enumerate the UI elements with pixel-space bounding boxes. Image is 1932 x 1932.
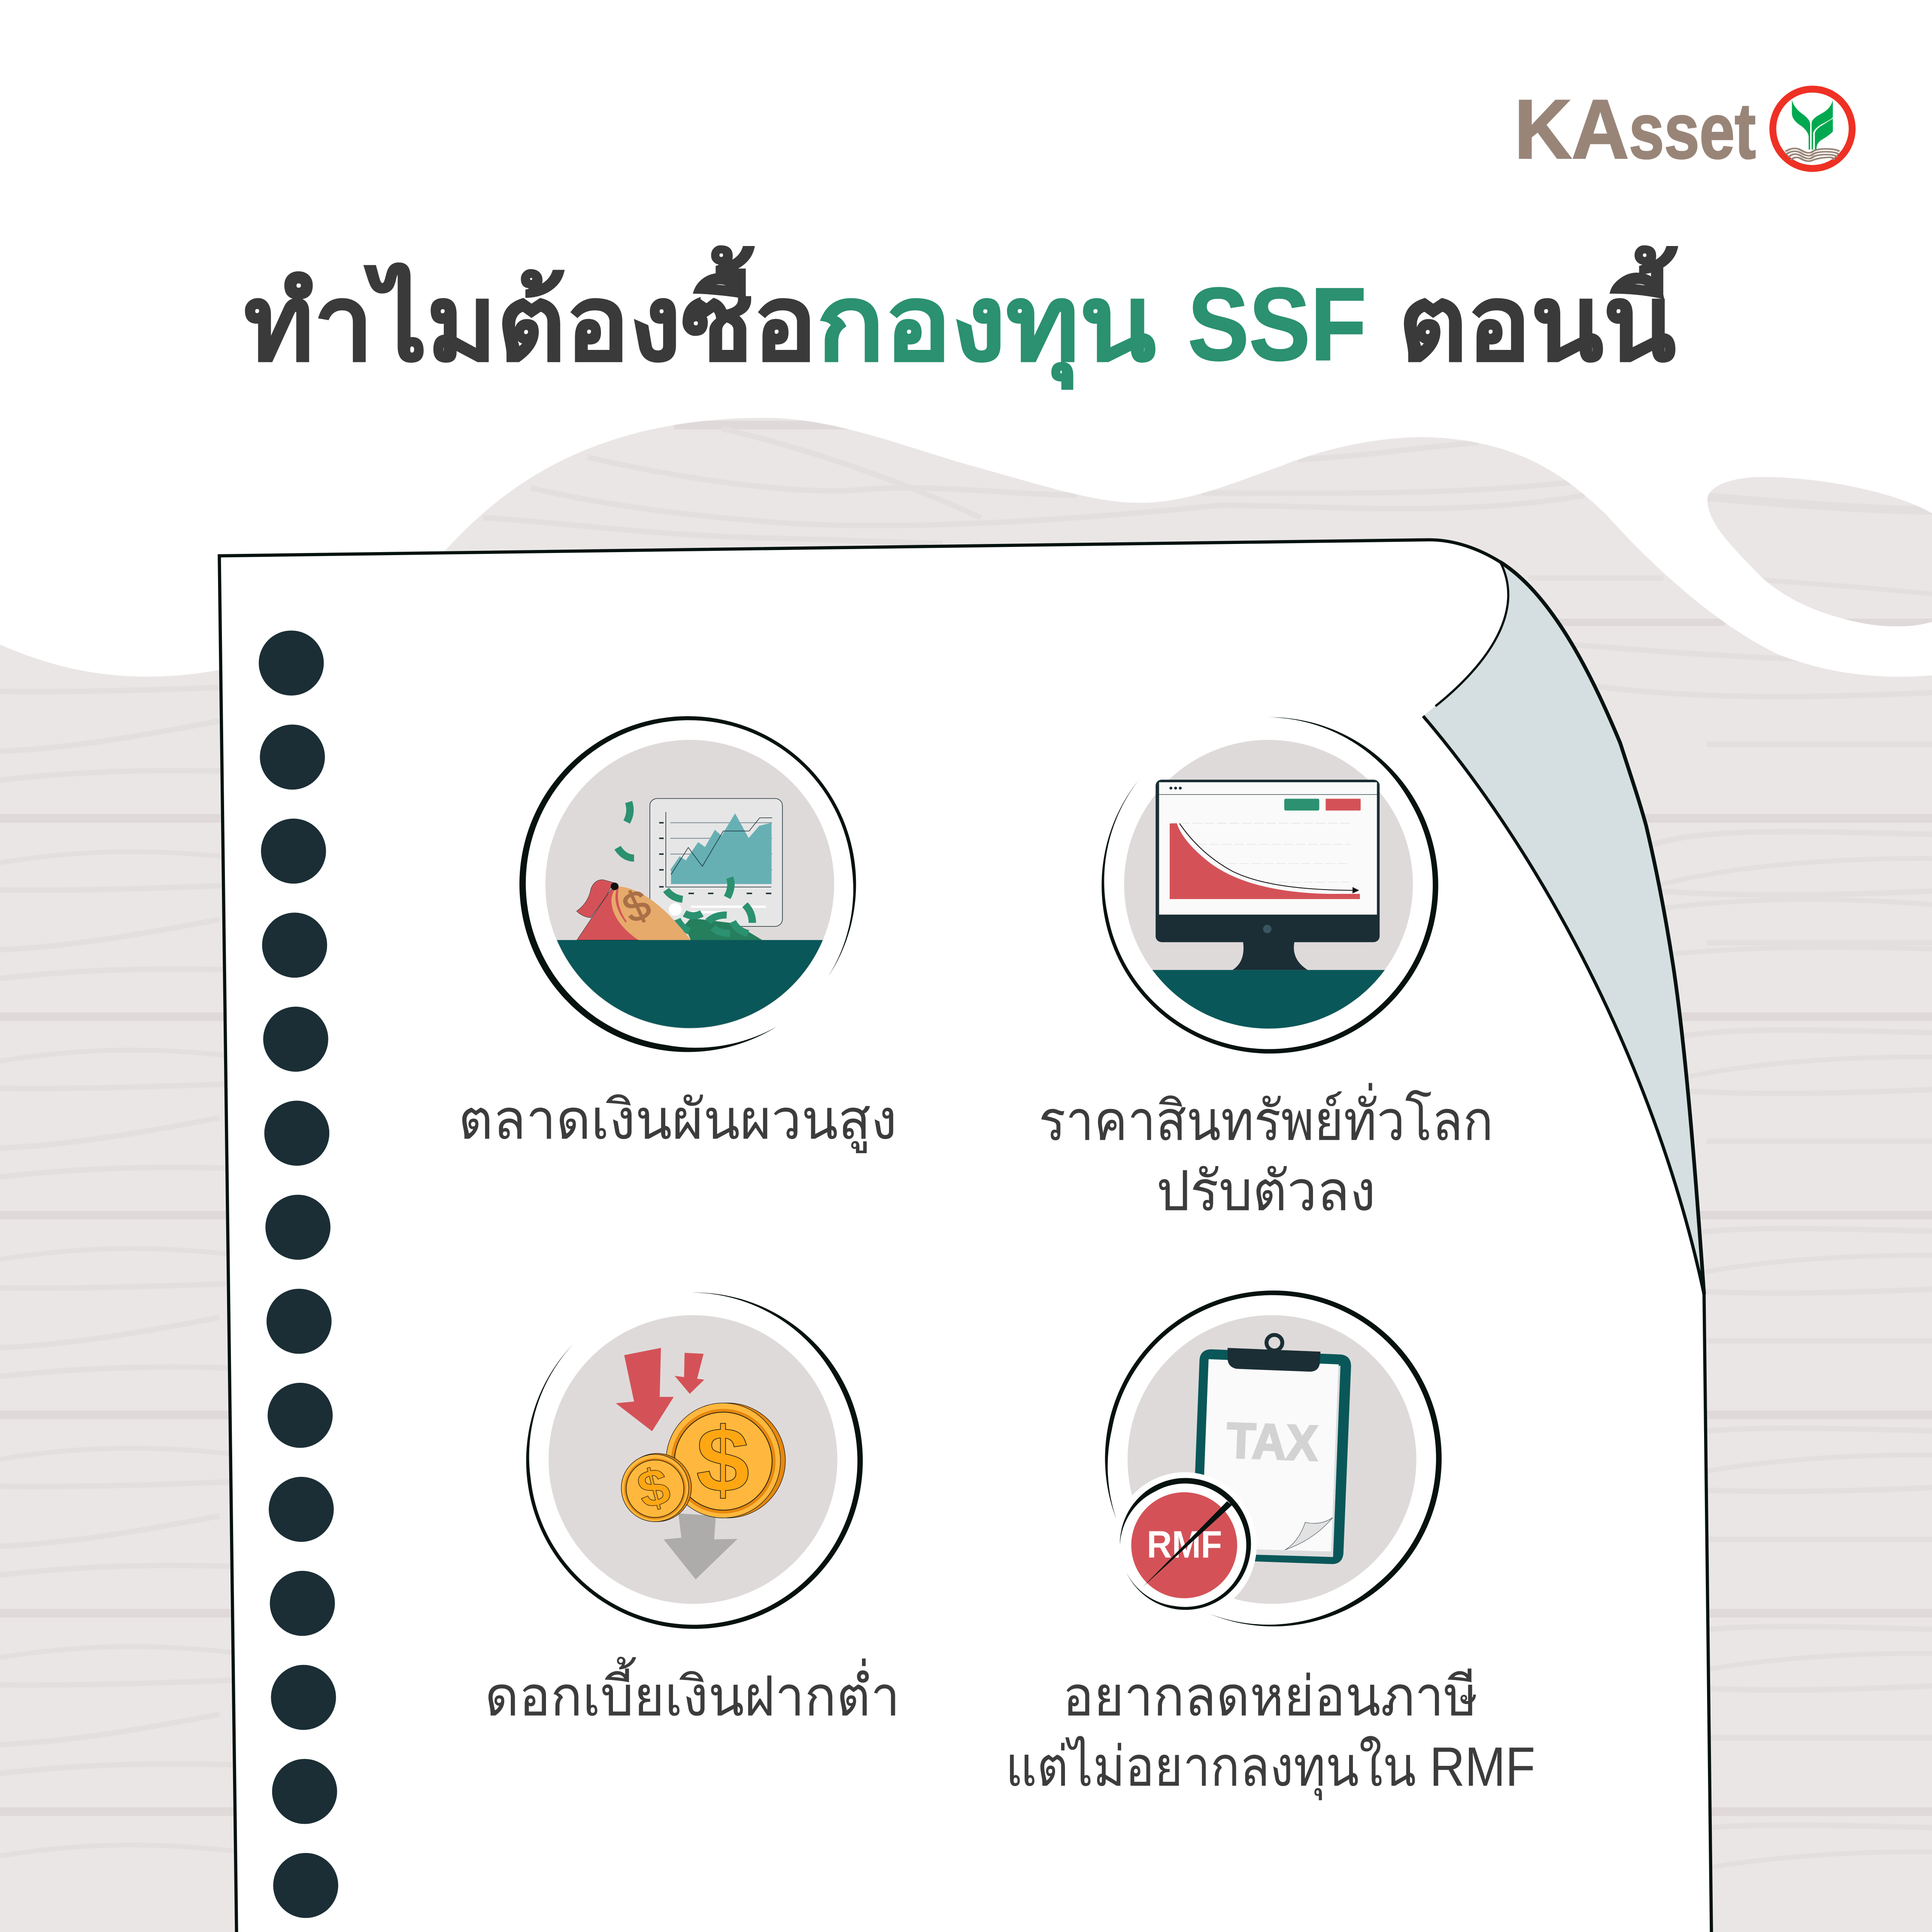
ring xyxy=(1105,1291,1442,1626)
money pile xyxy=(685,918,762,940)
ring xyxy=(1101,717,1438,1054)
title xyxy=(244,246,1677,389)
flying bills xyxy=(618,802,752,933)
title part 4: ตอนนี้ xyxy=(1398,246,1677,383)
logo: KAsset xyxy=(1514,82,1852,176)
text: market volatility: ตลาดเงินผันผวนสูง xyxy=(458,1089,897,1153)
RMF badge: RMF xyxy=(1147,1524,1222,1566)
icon: coins with falling arrows xyxy=(526,1293,863,1629)
text: tax reduction without RMF xyxy=(1005,1666,1535,1801)
teal ground xyxy=(1153,970,1385,1029)
grey disc xyxy=(1128,1315,1416,1604)
title part 1: ทำไมต้องซื้อ xyxy=(244,246,817,383)
line 2: ปรับตัวลง xyxy=(1156,1160,1376,1222)
paper sheet xyxy=(219,540,1711,1932)
binder holes xyxy=(259,631,338,1918)
ring xyxy=(519,716,856,1052)
ring xyxy=(526,1293,863,1629)
icon: tax clipboard and RMF prohibited xyxy=(1105,1291,1442,1626)
icon: volatile market money bag xyxy=(519,716,856,1052)
chart card xyxy=(650,799,783,927)
logo emblem xyxy=(1773,89,1852,168)
small coin: $ xyxy=(631,1456,676,1520)
logo wordmark xyxy=(1514,82,1756,176)
line 1: ราคาสินทรัพย์ทั่วโลก xyxy=(1039,1083,1493,1152)
big coin: $ xyxy=(696,1409,749,1511)
line 1: อยากลดหย่อนภาษี xyxy=(1063,1666,1478,1728)
RMF badge xyxy=(1113,1472,1257,1618)
clipboard: TAX xyxy=(1226,1413,1319,1471)
text: low deposit rate: ดอกเบี้ยเงินฝากต่ำ xyxy=(485,1657,900,1728)
monitor xyxy=(1156,780,1380,970)
grey disc xyxy=(1124,740,1413,1029)
panel: notebook paper xyxy=(219,540,1711,1932)
title part 3 highlighted: SSF xyxy=(1188,267,1366,382)
grey arrow xyxy=(664,1513,737,1580)
grey disc xyxy=(549,1315,837,1604)
large red arrow xyxy=(616,1348,674,1431)
small coin xyxy=(621,1453,692,1522)
grey disc xyxy=(545,740,834,1029)
money bag: $ xyxy=(616,881,658,933)
page curl xyxy=(1423,562,1704,1294)
text: global asset prices xyxy=(1039,1083,1493,1222)
logo wordmark: KA xyxy=(1514,82,1629,176)
logo wordmark: sset xyxy=(1629,87,1756,175)
icon: monitor with falling chart xyxy=(1101,717,1438,1054)
clipboard xyxy=(1195,1335,1351,1564)
line 2: แต่ไม่อยากลงทุนใน RMF xyxy=(1005,1736,1535,1801)
title part 2 highlighted: กองทุน xyxy=(817,264,1156,389)
small red arrow xyxy=(675,1353,704,1394)
big coin xyxy=(666,1403,786,1518)
money bag xyxy=(576,880,691,940)
teal ground xyxy=(557,940,823,1028)
